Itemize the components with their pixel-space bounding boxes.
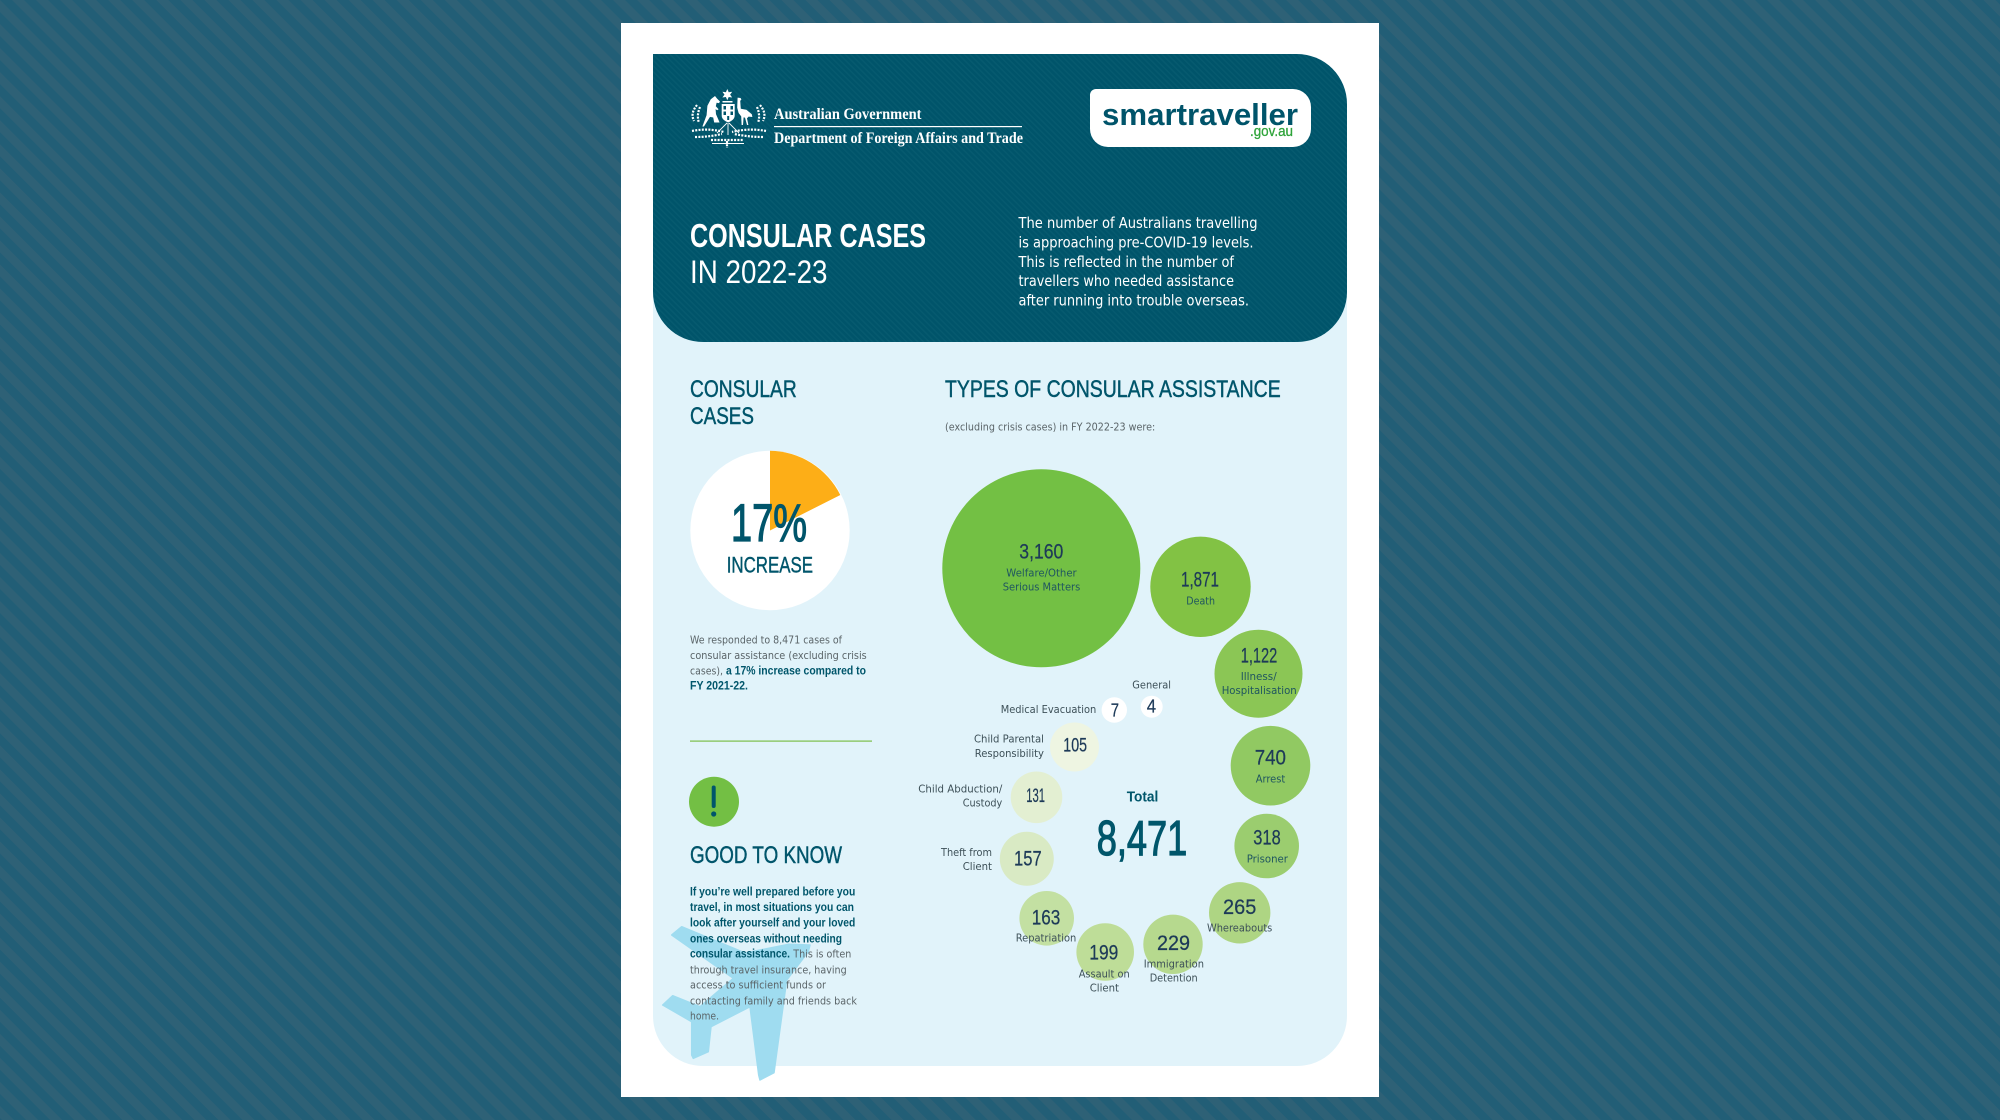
intro text: after running into trouble overseas. [1018,292,1249,310]
heading: consular cases: CASES [690,403,754,430]
text: cases summary: consular assistance (excluding crisis [690,649,867,662]
text: cases summary: FY 2021-22. [690,678,748,692]
text: good to know body: access to sufficient funds or [690,979,826,992]
bubble: assault on client: Client [1090,983,1119,995]
icon: Australian coat of arms [692,89,766,148]
text: good to know body: This is often [792,948,851,961]
bubble: illness: Hospitalisation [1222,685,1297,697]
text: good to know body: If you’re well prepared before you [690,885,855,899]
bubble: immigration detention: Immigration [1144,959,1204,971]
heading: good to know: GOOD TO KNOW [690,842,842,869]
title [690,217,926,290]
bubble: assault on client [1076,923,1134,995]
intro text: travellers who needed assistance [1018,272,1234,290]
text: good to know body: travel, in most situations you can [690,900,854,914]
logo: smartraveller: .gov.au [1250,123,1293,140]
bubble: child abduction: 131 [1026,785,1045,807]
bubble: whereabouts: Whereabouts [1207,923,1272,935]
bubble: whereabouts: 265 [1223,895,1256,919]
text: cases summary [690,633,867,692]
bubble: welfare: Welfare/Other [1006,568,1077,580]
bubble: theft from client: Client [963,861,992,873]
bubble: medical evacuation: Medical Evacuation [1001,704,1096,716]
bubble: whereabouts [1207,882,1272,944]
bubble: assault on client: 199 [1089,940,1118,964]
bubble: child abduction: Child Abduction/ [918,784,1003,796]
text: good to know body: through travel insurance, having [690,963,847,976]
pie chart: 17% increase: INCREASE [727,553,813,578]
bubble: illness [1214,630,1302,718]
bubble: child abduction: Custody [963,798,1002,810]
bubble: illness: Illness/ [1241,671,1277,683]
bubble: child parental responsibility: Responsibility [975,748,1044,760]
total [1097,788,1187,866]
bubble: repatriation: Repatriation [1016,933,1076,945]
pie chart: 17% increase [690,451,850,610]
heading: consular cases: CONSULAR [690,376,797,403]
subheading: (excluding crisis cases) in FY 2022-23 were: [945,421,1155,434]
text: good to know body [690,885,858,1023]
text: good to know body: look after yourself and your loved [690,916,855,930]
bubble: welfare: 3,160 [1019,540,1063,564]
bubble: immigration detention [1143,915,1204,985]
bubble: repatriation [1016,891,1076,946]
bubble: death: Death [1186,595,1215,607]
bubble: child parental responsibility [974,722,1099,772]
bubble: general [1132,680,1171,718]
bubble: theft from client: 157 [1014,847,1042,871]
bubble: illness: 1,122 [1241,643,1277,667]
text: good to know body: ones overseas without needing [690,931,842,945]
text: good to know body: home. [690,1010,719,1023]
bubble: prisoner: 318 [1253,825,1281,849]
text: good to know body: contacting family and friends back [690,994,858,1007]
total: 8,471 [1097,812,1187,866]
bubble: death: 1,871 [1181,568,1219,592]
header band [653,54,1347,342]
intro text: The number of Australians travelling [1018,214,1258,232]
intro text: is approaching pre-COVID-19 levels. [1018,233,1254,251]
icon: plane [663,927,810,1080]
bubble: general: General [1132,680,1171,692]
bubble: child parental responsibility: 105 [1063,734,1087,756]
bubble: repatriation: 163 [1032,905,1060,929]
bubble: medical evacuation: 7 [1111,699,1119,720]
total: Total [1127,788,1158,805]
bubble: theft from client [940,832,1054,886]
bubble: child parental responsibility: Child Parental [974,734,1044,746]
pie chart: 17% increase: 17% [731,494,807,553]
bubble: prisoner [1234,814,1299,878]
text: good to know body: consular assistance. [690,947,790,961]
government wordmark: Department of Foreign Affairs and Trade [774,130,1023,147]
bubble: arrest: 740 [1255,746,1286,770]
text: cases summary: We responded to 8,471 cases of [690,633,842,646]
logo: smartraveller [1090,89,1311,147]
intro text [1018,214,1258,310]
bubble: immigration detention: 229 [1157,931,1190,955]
bubble: immigration detention: Detention [1150,973,1198,985]
intro text: This is reflected in the number of [1018,253,1235,271]
title: CONSULAR CASES [690,217,926,254]
white page [621,23,1379,1097]
title: IN 2022-23 [690,254,828,290]
heading: types of consular assistance: TYPES OF CONSULAR ASSISTANCE [945,376,1281,403]
bubble: welfare [942,469,1140,667]
bubble chart [918,469,1310,995]
text: cases summary: a 17% increase compared to [726,663,866,677]
heading: consular cases [690,376,797,430]
bubble: arrest [1231,726,1310,806]
bubble: general: 4 [1147,696,1156,716]
text: cases summary: cases), [690,664,723,677]
government wordmark: Australian Government [774,106,922,123]
bubble: welfare: Serious Matters [1003,582,1080,594]
logo: smartraveller: smartraveller [1102,97,1298,132]
bubble: child abduction [918,772,1062,823]
government wordmark [774,106,1023,147]
light blue content panel [653,54,1347,1066]
bubble: assault on client: Assault on [1079,968,1130,980]
icon: exclamation [689,777,739,827]
bubble: medical evacuation [1001,697,1127,723]
bubble: death [1150,537,1251,637]
bubble: prisoner: Prisoner [1247,854,1289,866]
bubble: arrest: Arrest [1256,774,1285,786]
bubble: theft from client: Theft from [940,847,992,859]
